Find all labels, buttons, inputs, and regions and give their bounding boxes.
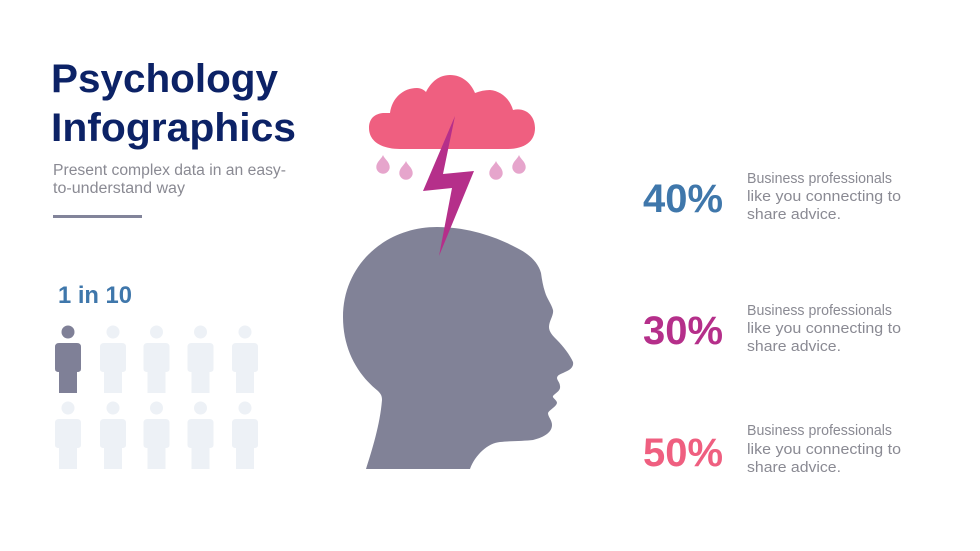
pictogram: 1 in 10 people — [55, 326, 258, 469]
description: 40%: like you connecting to — [747, 189, 901, 205]
description: 50%: Business professionals — [747, 423, 892, 439]
subtitle: to-understand way — [53, 180, 185, 197]
description: 30%: share advice. — [747, 339, 841, 355]
icon: person row 2 col 3 — [144, 402, 170, 469]
icon: person row 1 col 3 — [144, 326, 170, 393]
icon: person row 2 col 1 — [55, 402, 81, 469]
divider rule — [53, 215, 142, 218]
icon: person row 1 col 5 — [232, 326, 258, 393]
icon: person row 2 col 4 — [188, 402, 214, 469]
icon: person row 1 col 2 — [100, 326, 126, 393]
description: 40%: Business professionals — [747, 171, 892, 187]
description: 50%: like you connecting to — [747, 442, 901, 458]
heading: 1 in 10: 1 in 10 — [58, 282, 132, 309]
description: 40%: share advice. — [747, 207, 841, 223]
stat: 50% — [643, 423, 901, 476]
description: 50%: share advice. — [747, 460, 841, 476]
icon: person row 2 col 5 — [232, 402, 258, 469]
title: Psychology — [51, 57, 279, 101]
icon: lightning bolt — [423, 116, 474, 256]
subtitle — [53, 162, 286, 197]
icon: highlighted person — [55, 326, 81, 393]
icon: rain drops — [376, 155, 526, 180]
description: 50% — [747, 423, 901, 476]
icon: storm cloud — [369, 75, 535, 149]
description: 30% — [747, 303, 901, 355]
stat: 40% — [643, 171, 901, 223]
description: 30%: Business professionals — [747, 303, 892, 319]
stat: 30% — [643, 303, 901, 355]
stat: 30%: 30% — [643, 309, 723, 353]
description: 30%: like you connecting to — [747, 321, 901, 337]
subtitle: Present complex data in an easy- — [53, 162, 286, 179]
title: Infographics — [51, 106, 296, 150]
icon: person row 2 col 2 — [100, 402, 126, 469]
icon: head silhouette — [343, 227, 573, 469]
stat: 50%: 50% — [643, 431, 723, 475]
stat: 40%: 40% — [643, 177, 723, 221]
description: 40% — [747, 171, 901, 223]
title — [51, 57, 296, 150]
icon: person row 1 col 4 — [188, 326, 214, 393]
